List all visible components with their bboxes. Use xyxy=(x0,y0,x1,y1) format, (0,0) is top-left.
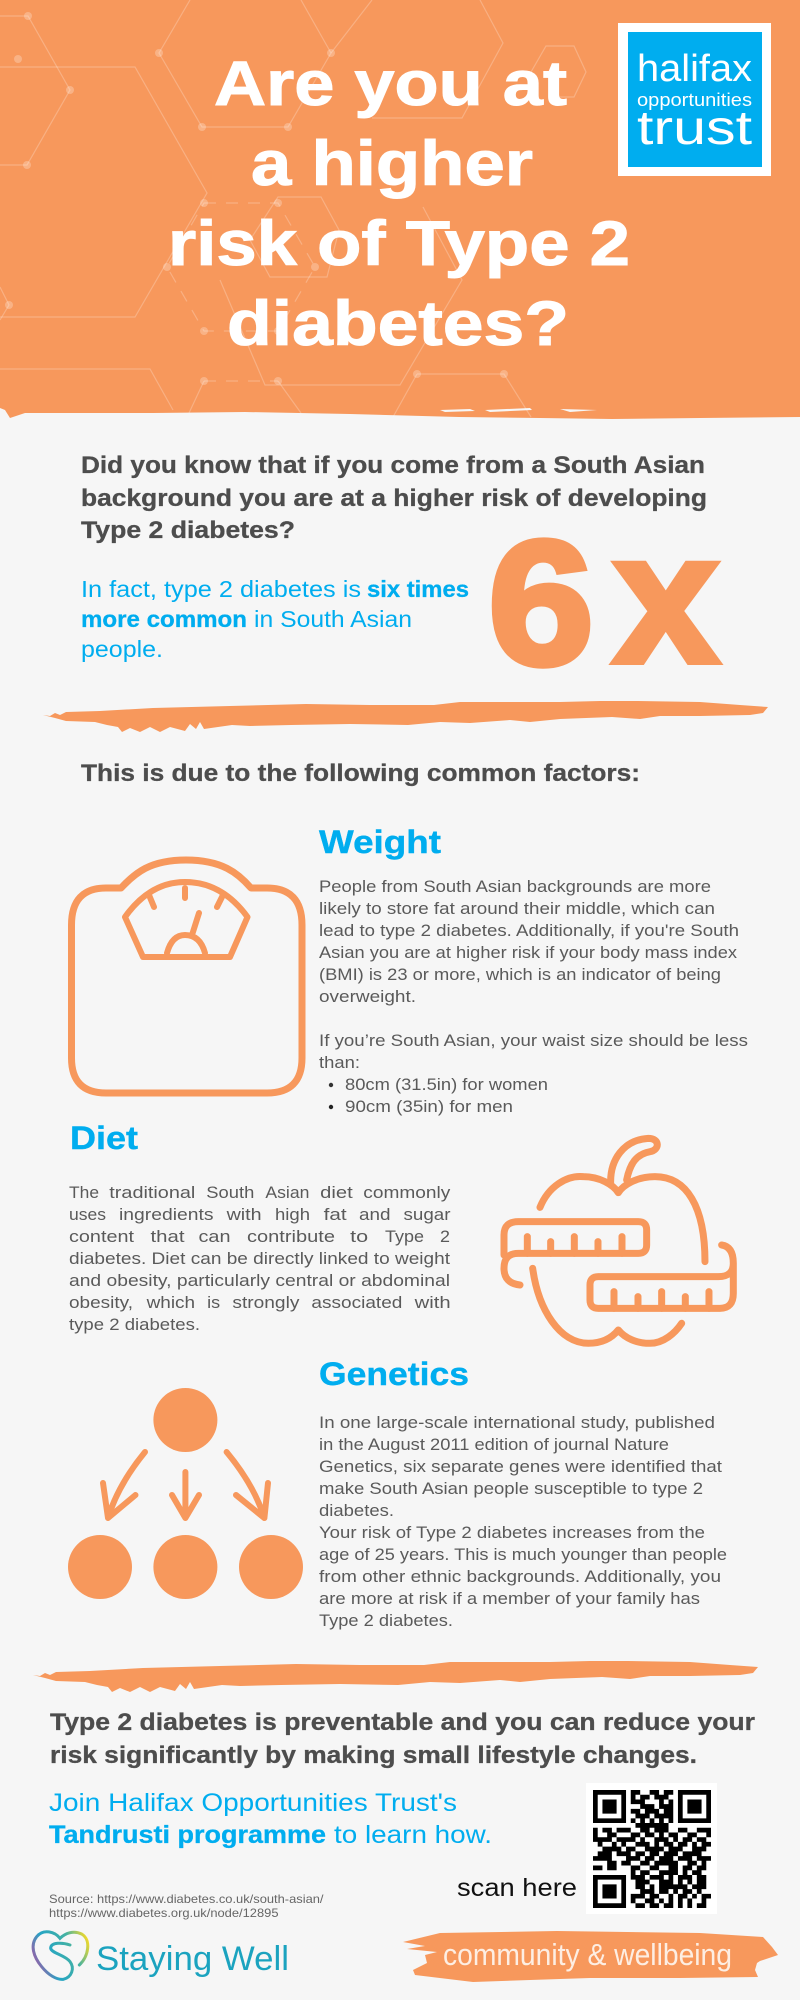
text: diet body: contribute xyxy=(247,1227,335,1246)
text: diet body: uses xyxy=(69,1205,106,1224)
intro question xyxy=(81,452,707,544)
text: weight body: lead to type 2 diabetes. Additionally, if you're South xyxy=(319,921,739,940)
icon: apple with tape measure xyxy=(504,1138,733,1343)
text: genetics body: Your risk of Type 2 diabetes increases from the xyxy=(319,1523,705,1542)
title: a higher xyxy=(251,129,533,199)
panel: genetics xyxy=(68,1356,727,1630)
text: diet body: commonly xyxy=(363,1183,451,1202)
logo: Staying Well xyxy=(33,1932,289,1979)
text: weight body: (BMI) is 23 or more, which is an indicator of being xyxy=(319,965,721,984)
logo: Halifax Opportunities Trust xyxy=(618,23,771,176)
text: weight body xyxy=(319,877,748,1116)
six times statement: six times xyxy=(367,576,469,602)
prevention statement: Type 2 diabetes is preventable and you can reduce your xyxy=(50,1709,755,1736)
icon: weighing scales xyxy=(72,860,302,1093)
six times statement xyxy=(81,576,469,662)
text: diet body: to xyxy=(350,1227,368,1246)
header banner xyxy=(0,0,800,419)
title: diabetes? xyxy=(227,289,569,359)
text: diet body: type 2 diabetes. xyxy=(69,1315,200,1334)
text: weight body: likely to store fat around their middle, which can xyxy=(319,899,715,918)
text: diet body: is xyxy=(207,1293,220,1312)
source citation: https://www.diabetes.org.uk/node/12895 xyxy=(49,1906,279,1920)
text: diet body: obesity, xyxy=(69,1293,133,1312)
text: weight body: If you’re South Asian, your waist size should be less xyxy=(319,1031,748,1050)
call to action: Join Halifax Opportunities Trust's xyxy=(49,1789,457,1817)
prevention statement: risk significantly by making small lifestyle changes. xyxy=(50,1742,697,1769)
text: genetics body: In one large-scale international study, published xyxy=(319,1413,715,1432)
logo: Halifax Opportunities Trust: opportunities xyxy=(637,90,752,110)
text: diet body: with xyxy=(414,1293,451,1312)
source citation xyxy=(49,1892,324,1920)
text: genetics body: Genetics, six separate genes were identified that xyxy=(319,1457,722,1476)
title: Are you at xyxy=(214,49,567,119)
text: diet body: which xyxy=(145,1293,195,1312)
brush divider xyxy=(33,1661,758,1692)
text: diet body: Asian xyxy=(265,1183,309,1202)
text: diet body: traditional xyxy=(109,1183,195,1202)
scan here label: scan here xyxy=(457,1874,577,1902)
text: weight body: Asian you are at higher risk if your body mass index xyxy=(319,943,738,962)
text: diet body: high xyxy=(275,1205,310,1224)
intro question: Did you know that if you come from a South Asian xyxy=(81,452,705,479)
six times statement: in South Asian xyxy=(254,606,412,632)
text: diet body: sugar xyxy=(404,1205,451,1224)
icon: family tree of circles and arrows xyxy=(68,1388,303,1599)
text: genetics body: from other ethnic backgrounds. Additionally, you xyxy=(319,1567,721,1586)
call to action: to learn how. xyxy=(334,1821,492,1849)
text: diet body: diet xyxy=(320,1183,353,1202)
text: diet body: 2 xyxy=(440,1227,450,1246)
call to action: Tandrusti programme xyxy=(49,1821,326,1849)
intro question: Type 2 diabetes? xyxy=(81,517,295,544)
panel: weight xyxy=(72,824,748,1116)
text: genetics body: diabetes. xyxy=(319,1501,394,1520)
logo: Halifax Opportunities Trust: halifax xyxy=(637,48,752,90)
brush divider xyxy=(43,701,768,732)
heading: weight: Weight xyxy=(319,824,441,860)
big 6x figure xyxy=(488,495,719,702)
six times statement: more common xyxy=(81,606,247,632)
big 6x figure: x xyxy=(613,495,719,702)
QR code xyxy=(586,1783,717,1914)
text: weight body: 90cm (35in) for men xyxy=(345,1097,513,1116)
text: weight body: than: xyxy=(319,1053,360,1072)
six times statement: In fact, type 2 diabetes is xyxy=(81,576,361,602)
six times statement: people. xyxy=(81,636,163,662)
text: diet body: The xyxy=(69,1183,99,1202)
text: diet body: associated xyxy=(311,1293,402,1312)
prevention statement xyxy=(50,1709,755,1769)
text: genetics body: age of 25 years. This is much younger than people xyxy=(319,1545,727,1564)
text: weight body: overweight. xyxy=(319,987,416,1006)
text: genetics body: are more at risk if a member of your family has xyxy=(319,1589,700,1608)
brush badge: community & wellbeing xyxy=(403,1931,778,1982)
heading: diet: Diet xyxy=(70,1120,138,1156)
text: weight body: 80cm (31.5in) for women xyxy=(345,1075,548,1094)
intro question: background you are at a higher risk of developing xyxy=(81,485,707,512)
factors heading: This is due to the following common factors: xyxy=(81,760,640,787)
text: genetics body: make South Asian people susceptible to type 2 xyxy=(319,1479,703,1498)
text: genetics body: in the August 2011 edition of journal Nature xyxy=(319,1435,669,1454)
source citation: Source: https://www.diabetes.co.uk/south-asian/ xyxy=(49,1892,324,1906)
big 6x figure: 6 xyxy=(488,504,594,702)
text: genetics body: Type 2 diabetes. xyxy=(319,1611,453,1630)
text: diet body: South xyxy=(206,1183,254,1202)
logo: Halifax Opportunities Trust: trust xyxy=(637,102,752,155)
call to action xyxy=(49,1789,492,1849)
text: genetics body xyxy=(319,1413,727,1630)
text: diet body: and obesity, particularly central or abdominal xyxy=(69,1271,450,1290)
heading: genetics: Genetics xyxy=(319,1356,469,1392)
text: diet body: with xyxy=(225,1205,262,1224)
text: diet body: diabetes. Diet can be directly linked to weight xyxy=(69,1249,450,1268)
text: diet body: can xyxy=(198,1227,230,1246)
title: risk of Type 2 xyxy=(168,209,630,279)
text: diet body: that xyxy=(150,1227,185,1246)
text: diet body: and xyxy=(359,1205,390,1224)
text: diet body xyxy=(69,1183,451,1334)
text: diet body: ingredients xyxy=(119,1205,214,1224)
text: diet body: Type xyxy=(385,1227,424,1246)
panel: diet xyxy=(69,1120,733,1343)
text: diet body: strongly xyxy=(232,1293,300,1312)
title xyxy=(168,49,630,359)
text: diet body: fat xyxy=(324,1205,347,1224)
logo: Staying Well: Staying Well xyxy=(96,1940,289,1978)
brush badge: community & wellbeing: community & wellbeing xyxy=(443,1937,732,1972)
text: diet body: content xyxy=(69,1227,134,1246)
text: weight body: People from South Asian backgrounds are more xyxy=(319,877,711,896)
